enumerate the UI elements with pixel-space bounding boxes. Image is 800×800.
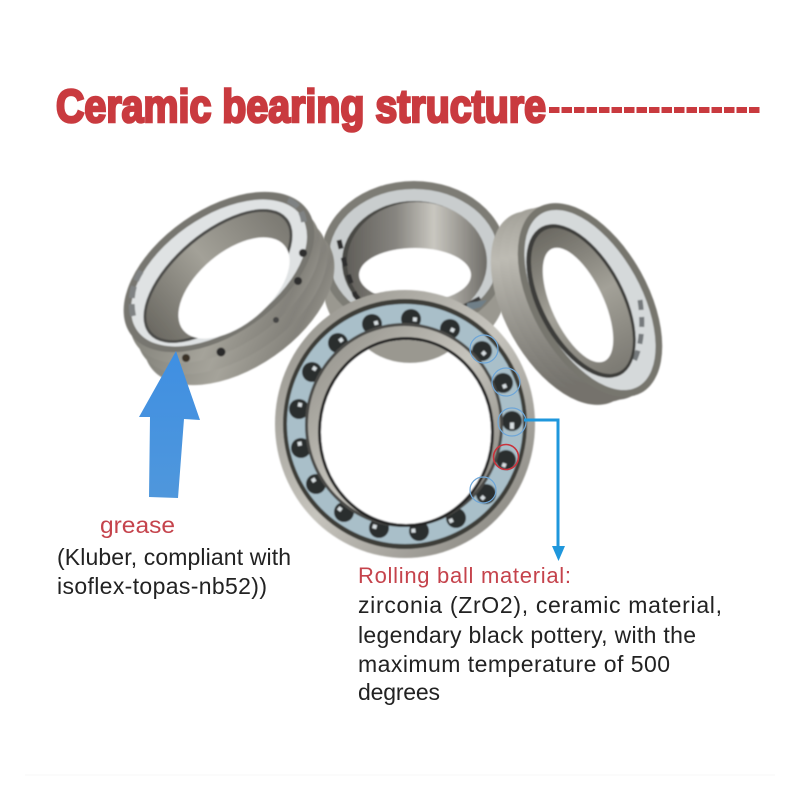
left bearing with grease [95,159,363,418]
rolling ball material label: degrees [358,679,440,705]
ceramic balls [289,309,522,541]
arrow: rolling ball pointer [524,420,565,561]
right bearing [461,179,692,429]
rolling ball material label: zirconia (ZrO2), ceramic material, [358,592,722,618]
grease label: (Kluber, compliant with [57,544,291,570]
front bearing with ceramic balls [275,257,535,558]
rolling ball material label [358,563,722,705]
grease label [57,512,291,599]
back bearing seen through hole [368,338,448,364]
rolling ball material label: legendary black pottery, with the [358,622,696,648]
title: Ceramic bearing structure [56,80,546,132]
cage [287,304,523,544]
back bearing [321,181,507,362]
grease label: grease [100,512,175,538]
rolling ball material label: maximum temperature of 500 [358,651,670,677]
grease label: isoflex-topas-nb52)) [57,573,267,599]
grease ring [105,170,333,376]
arrow: grease pointer [139,351,200,498]
rolling ball material label: Rolling ball material: [358,563,571,588]
infographic canvas [56,87,760,705]
ball highlight circles [470,335,526,503]
